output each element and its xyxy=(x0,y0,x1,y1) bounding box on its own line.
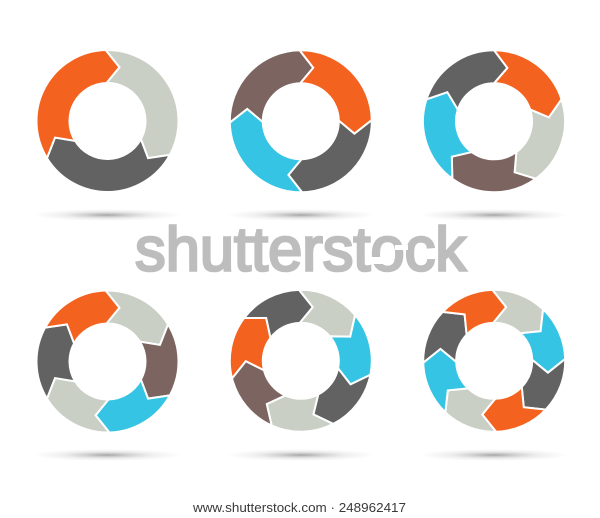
arrow: dark gray xyxy=(422,311,467,363)
arrow: sage xyxy=(262,381,333,449)
footer: stock image id: www.shutterstock.com · 248962417 xyxy=(192,500,406,515)
ring: six arrows xyxy=(13,270,202,453)
shadow: top left ring xyxy=(33,209,181,221)
ring: seven arrows xyxy=(217,271,393,451)
arrow: brown xyxy=(221,359,291,426)
arrow: sage xyxy=(106,48,179,159)
ring: three arrows xyxy=(8,39,181,220)
ring: five arrows xyxy=(398,35,582,218)
arrow: cyan xyxy=(91,369,170,449)
arrow: brown xyxy=(442,124,536,218)
arrow: dark gray xyxy=(40,103,170,217)
arrow: sage xyxy=(46,377,109,434)
arrow: brown xyxy=(229,50,314,123)
shadow: bottom left ring xyxy=(33,449,181,461)
ring: four arrows xyxy=(229,49,373,194)
arrow: sage xyxy=(106,289,169,346)
arrow: orange xyxy=(494,50,562,117)
arrow: orange xyxy=(479,379,546,446)
arrow: cyan xyxy=(230,108,302,194)
shadow: bottom right ring xyxy=(420,449,568,461)
arrow: orange xyxy=(45,274,124,354)
arrow: sage xyxy=(445,388,496,433)
arrow: dark gray xyxy=(426,35,511,120)
arrow: dark gray xyxy=(312,365,370,429)
shadow: top middle ring xyxy=(227,209,375,221)
arrow: dark gray xyxy=(244,274,316,347)
shadow: top right ring xyxy=(420,209,568,221)
arrow: sage xyxy=(492,289,544,334)
arrow: orange xyxy=(218,313,279,378)
arrow: brown xyxy=(120,324,200,406)
watermark: shutterstock xyxy=(135,216,467,284)
arrow: cyan xyxy=(318,315,391,389)
arrow: orange xyxy=(300,49,372,135)
arrow: cyan xyxy=(398,85,492,179)
arrow: cyan xyxy=(513,309,579,376)
arrow: sage xyxy=(299,288,356,338)
arrow: dark gray xyxy=(15,317,95,399)
arrow: orange xyxy=(10,40,140,158)
arrow: sage xyxy=(498,99,582,184)
arrow: cyan xyxy=(409,346,476,412)
ring: eight arrows xyxy=(406,273,582,449)
shadow: bottom middle ring xyxy=(227,449,375,461)
arrow: orange xyxy=(443,276,509,342)
arrow: dark gray xyxy=(288,120,373,193)
arrow: dark gray xyxy=(521,359,566,410)
